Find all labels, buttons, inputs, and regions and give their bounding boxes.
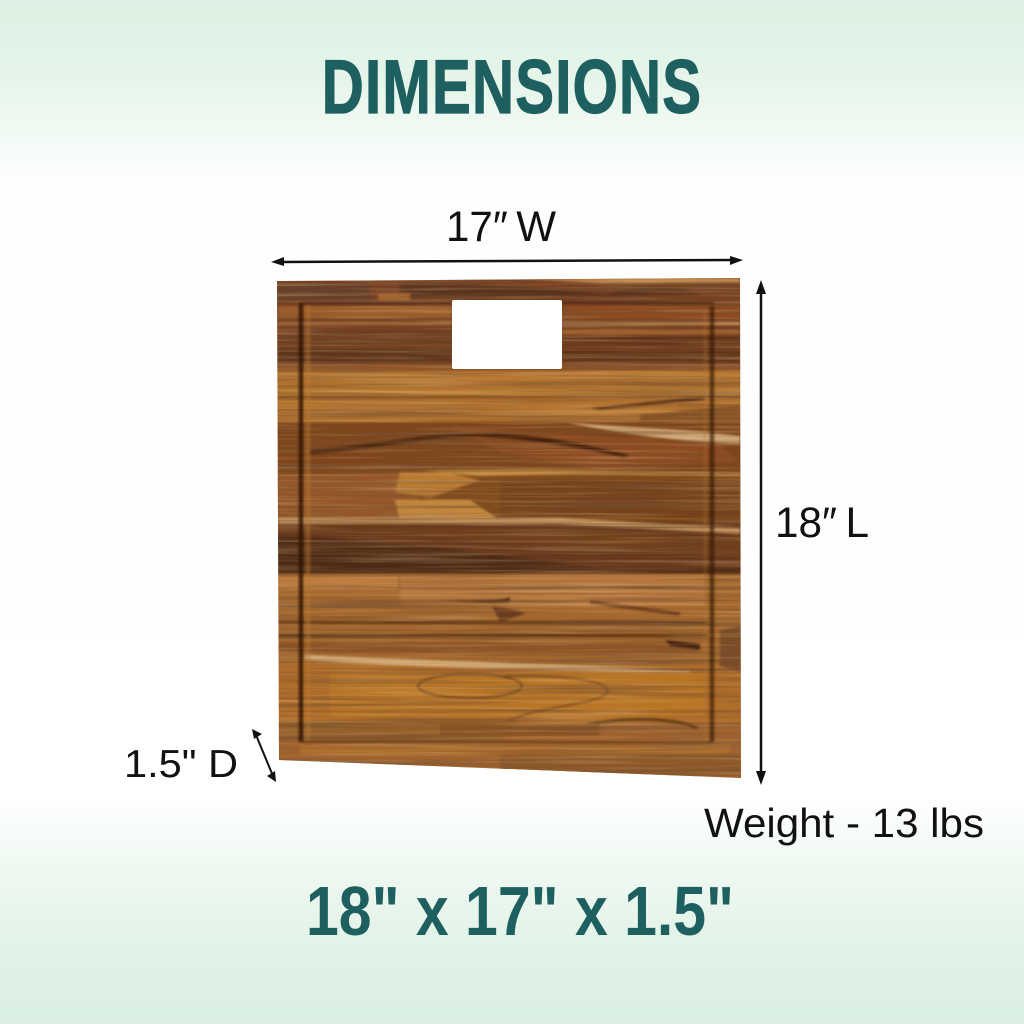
arrow: depth [252, 729, 276, 782]
juice groove [301, 303, 714, 742]
cutting board [270, 272, 750, 782]
handle cutout [452, 300, 562, 369]
arrow: width [271, 256, 743, 266]
title: DIMENSIONS [322, 46, 702, 130]
wood grain [278, 278, 741, 775]
grain texture [270, 272, 750, 782]
width label: 17″ W [446, 203, 556, 251]
dimensions summary: 18" x 17" x 1.5" [306, 872, 734, 950]
wood planks [270, 272, 750, 782]
arrow: length [756, 280, 766, 785]
weight label: Weight - 13 lbs [704, 800, 984, 846]
length label: 18″ L [775, 499, 869, 547]
depth label: 1.5" D [124, 743, 238, 786]
